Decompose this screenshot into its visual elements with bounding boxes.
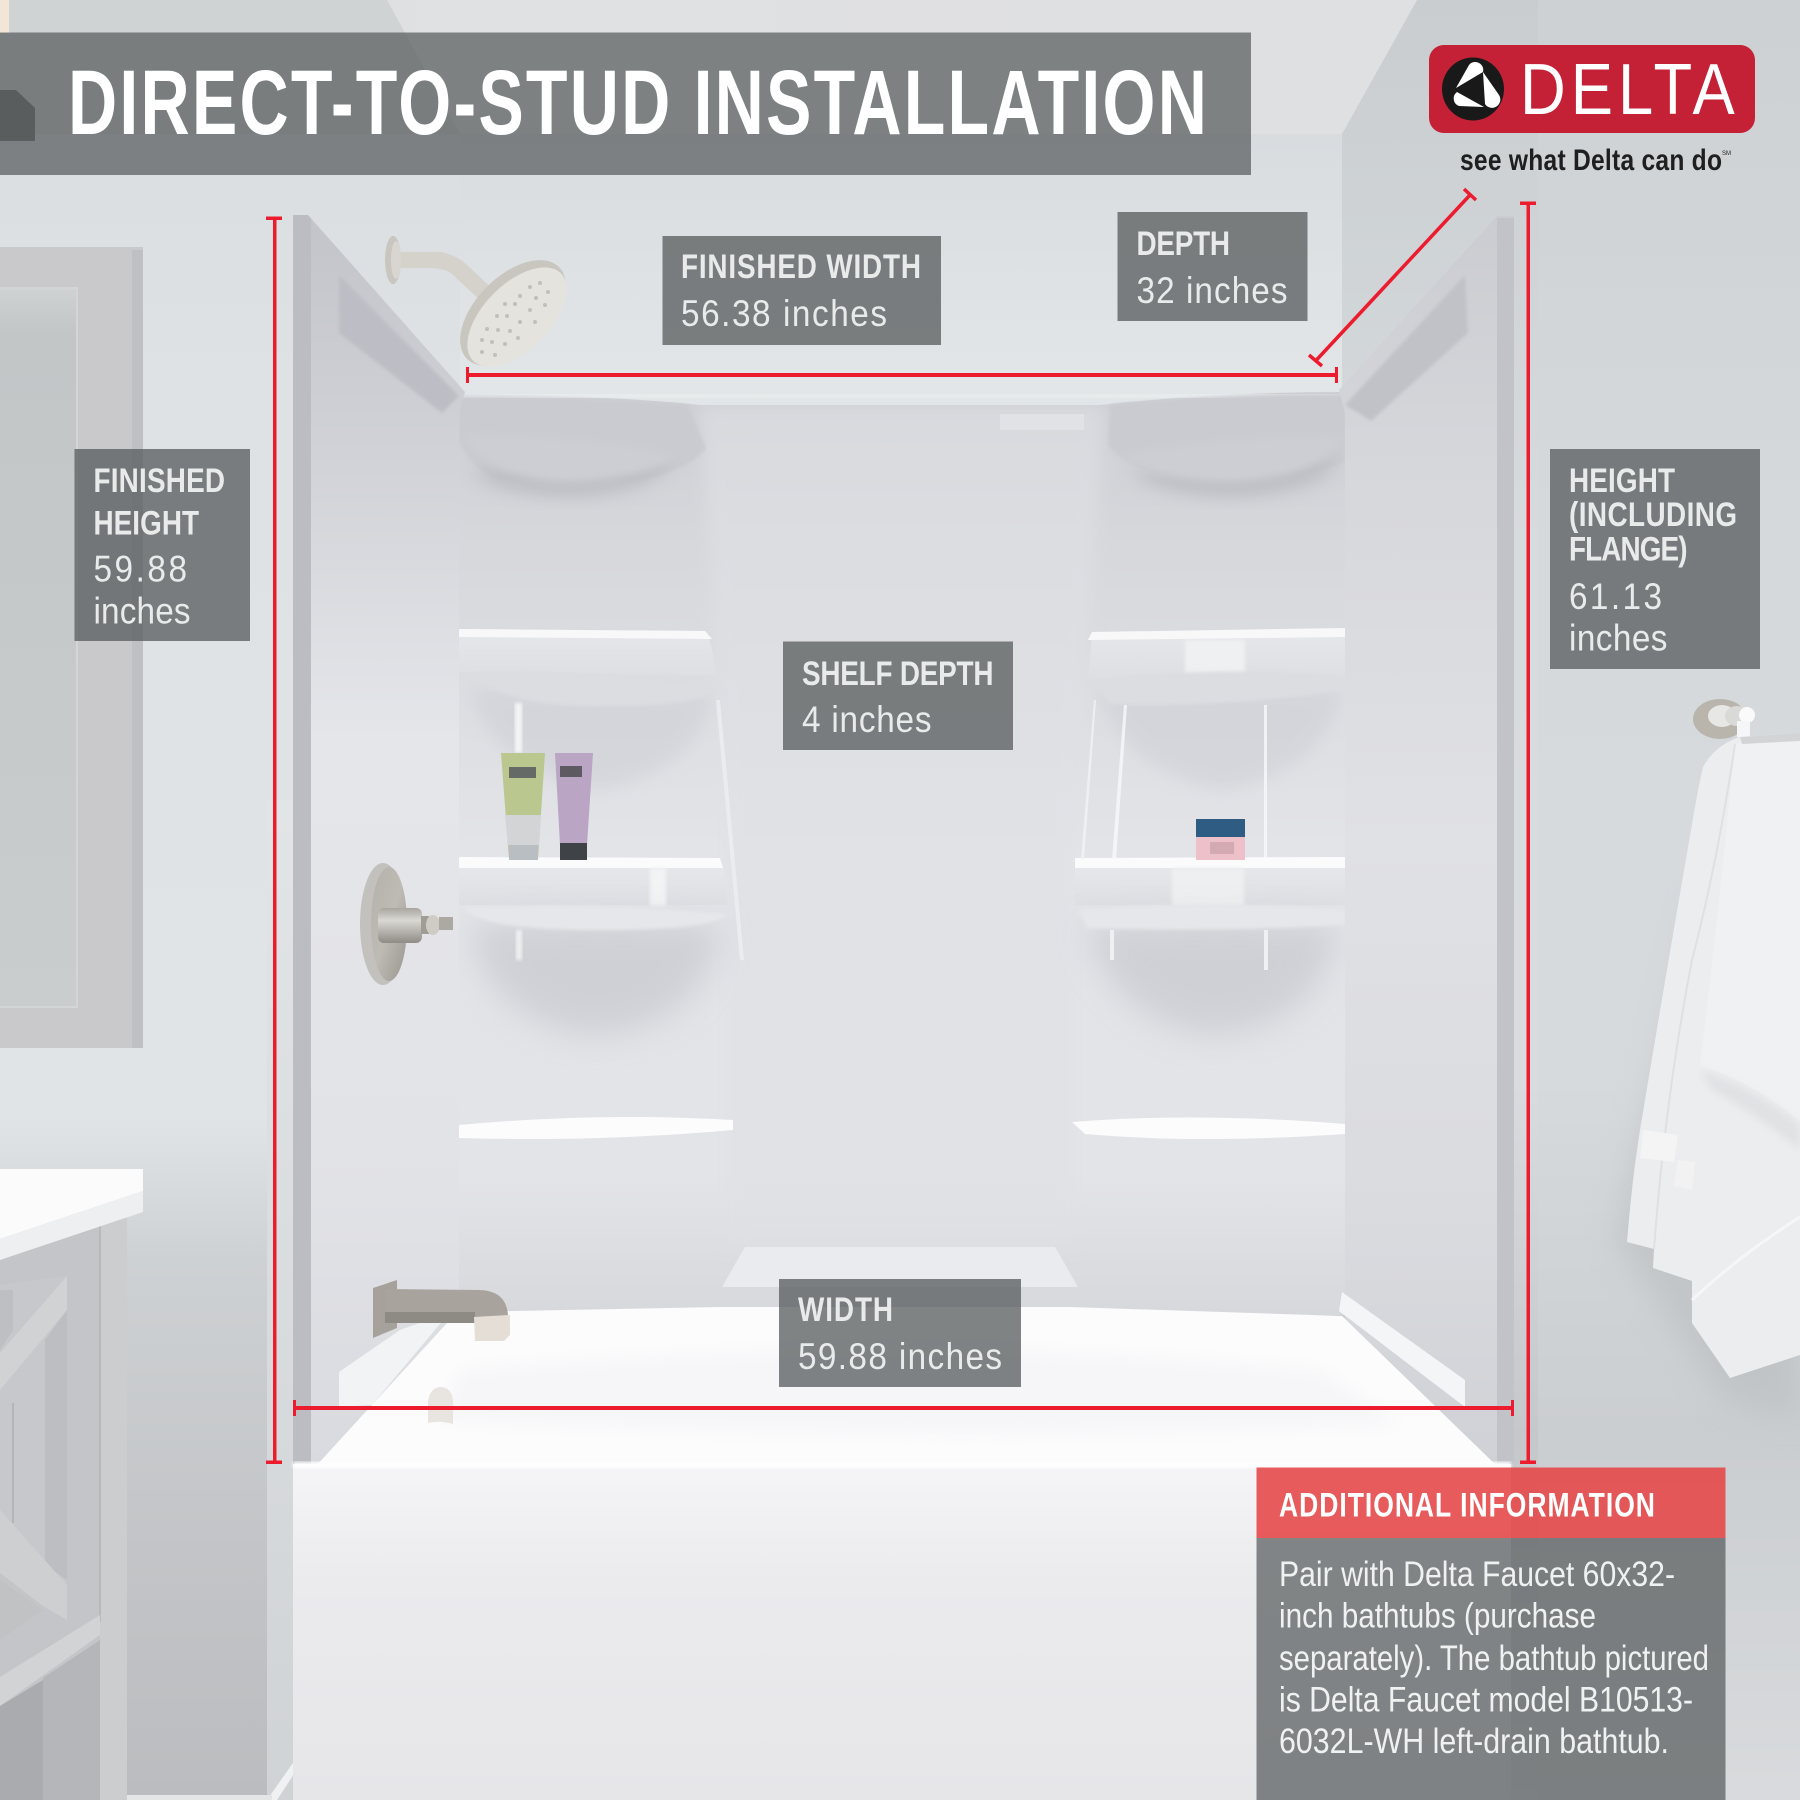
- wall trim and baseboard beside tub: [127, 800, 303, 1800]
- label: depth: 32 inches: [1136, 270, 1288, 311]
- left side wall panel: [293, 215, 465, 1464]
- panel heading: ADDITIONAL INFORMATION: [1279, 1486, 1655, 1524]
- right corner shelves: [1072, 394, 1345, 1139]
- back wall of surround: [459, 392, 1345, 1315]
- label: height including flange: HEIGHT: [1569, 461, 1675, 500]
- panel body text: 6032L-WH left-drain bathtub.: [1279, 1722, 1669, 1761]
- label: width: WIDTH: [798, 1290, 893, 1329]
- dimension line: width: [293, 1400, 1514, 1416]
- label: width: [779, 1279, 1021, 1387]
- green and purple toiletry tubes: [501, 753, 593, 860]
- dimension line: depth: [1309, 189, 1476, 366]
- panel body text: [1256, 1538, 1726, 1800]
- panel body text: Pair with Delta Faucet 60x32-: [1279, 1555, 1675, 1594]
- label: height including flange: inches: [1569, 618, 1667, 659]
- panel heading: [1256, 1468, 1726, 1538]
- label: finished height: [74, 449, 250, 641]
- wall shadow behind towel: [1615, 900, 1800, 1420]
- panel body text: separately). The bathtub pictured: [1279, 1639, 1709, 1678]
- label: height including flange: [1550, 449, 1760, 669]
- label: height including flange: FLANGE): [1569, 530, 1687, 568]
- left corner shelves: [459, 397, 744, 1139]
- dimension line: height including flange: [1520, 202, 1536, 1464]
- vanity with X-panel door: [0, 1169, 143, 1800]
- towel bar hook: [1693, 699, 1755, 739]
- label: finished height: inches: [94, 591, 191, 632]
- mirror with grey frame: [0, 247, 143, 1048]
- label: shelf depth: [783, 642, 1013, 750]
- panel body text: inch bathtubs (purchase: [1279, 1596, 1596, 1636]
- label: finished height: HEIGHT: [94, 504, 199, 542]
- wall sconce at top left: [0, 0, 35, 141]
- label: depth: [1118, 212, 1308, 321]
- bathtub: [293, 1307, 1511, 1800]
- right side wall panel: [1339, 216, 1514, 1464]
- label: shelf depth: SHELF DEPTH: [802, 654, 993, 693]
- icon: tub spout: [373, 1280, 510, 1341]
- hanging white towel: [1627, 733, 1800, 1378]
- title bar: DIRECT-TO-STUD INSTALLATION: [68, 52, 1207, 154]
- label: finished height: FINISHED: [94, 461, 225, 500]
- Delta logo: SM: [1722, 151, 1731, 157]
- label: finished width: 56.38 inches: [681, 293, 887, 334]
- label: height including flange: 61.13: [1569, 576, 1662, 617]
- label: finished width: [662, 236, 941, 345]
- Delta logo: see what Delta can do: [1460, 143, 1722, 177]
- panel body text: is Delta Faucet model B10513-: [1279, 1680, 1693, 1720]
- label: height including flange: (INCLUDING: [1569, 495, 1737, 534]
- dimension line: finished height: [266, 216, 282, 1464]
- Delta logo: [1429, 45, 1755, 177]
- pink and blue jar: [1196, 819, 1245, 860]
- label: finished height: 59.88: [94, 549, 187, 590]
- title bar: [0, 32, 1251, 175]
- label: finished width: FINISHED WIDTH: [681, 247, 921, 286]
- Delta logo: DELTA: [1520, 50, 1735, 130]
- label: width: 59.88 inches: [798, 1336, 1002, 1377]
- icon: shower valve handle: [360, 863, 453, 985]
- panel: additional information: [1256, 1468, 1726, 1800]
- label: shelf depth: 4 inches: [802, 699, 932, 740]
- icon: shower head: [385, 236, 585, 385]
- label: depth: DEPTH: [1136, 224, 1230, 263]
- dimension line: finished width: [466, 367, 1338, 383]
